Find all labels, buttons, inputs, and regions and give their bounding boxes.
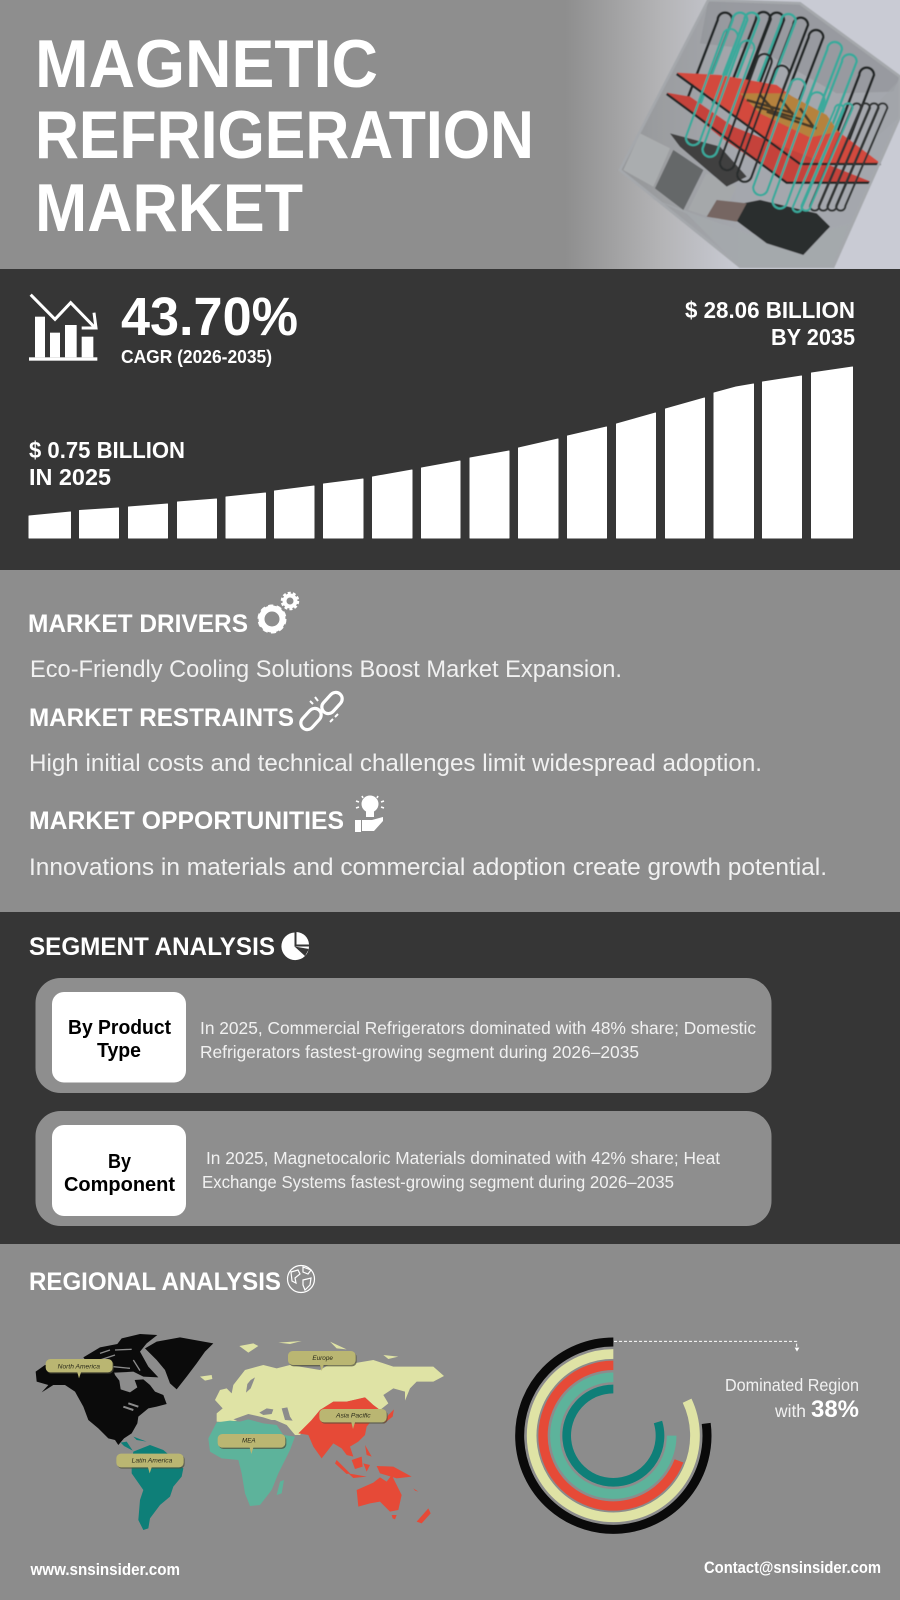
heading: regional analysis: REGIONAL ANALYSIS: [29, 1268, 281, 1296]
label: [64, 1151, 175, 1196]
label: Component: [64, 1174, 175, 1196]
description: [200, 1018, 756, 1062]
heading: market opportunities: MARKET OPPORTUNITIES: [29, 807, 344, 835]
footer: website: www.snsinsider.com: [30, 1561, 180, 1579]
label: Type: [97, 1040, 141, 1062]
description: In 2025, Magnetocaloric Materials dominated with 42% share; Heat: [206, 1148, 720, 1168]
icon: bulb in hand: [355, 796, 384, 832]
label: By Product: [68, 1017, 171, 1039]
callout: North America: North America: [58, 1363, 100, 1370]
panel: market dynamics: [0, 570, 900, 912]
callout: Latin America: [116, 1454, 185, 1473]
heading: segment analysis: SEGMENT ANALYSIS: [29, 933, 275, 961]
panel: segment analysis: [0, 912, 900, 1244]
map: Latin America: [121, 1437, 183, 1530]
title: MAGNETIC: [35, 26, 378, 102]
bar chart: growth: [29, 367, 852, 538]
map: Asia Pacific: [298, 1397, 431, 1523]
text: opportunities: Innovations in materials and commercial adoption create growth potential.: [29, 854, 827, 881]
panel: market size: [0, 269, 900, 570]
callout: Asia Pacific: Asia Pacific: [335, 1413, 371, 1420]
callout: Europe: [288, 1351, 357, 1371]
panel: regional analysis: [0, 1244, 900, 1600]
callout: MEA: [218, 1434, 286, 1454]
card: by product type: [36, 978, 772, 1093]
icon: globe: [288, 1266, 314, 1292]
callout: dominated region: Dominated Region: [725, 1375, 859, 1395]
callout: Asia Pacific: [319, 1409, 388, 1429]
title: REFRIGERATION: [35, 97, 534, 173]
arrow: dashed leader: [614, 1341, 799, 1352]
icon: gears: [259, 593, 298, 632]
world map: [36, 1334, 444, 1530]
icon: broken link: [298, 690, 345, 732]
2025 value: $ 0.75 BILLION: [29, 437, 185, 463]
label: [68, 1017, 171, 1062]
callout: dominated region: [725, 1375, 859, 1423]
radial chart: [520, 1342, 707, 1529]
icon: trend chart: [29, 295, 97, 361]
2035 value: [685, 297, 855, 350]
label box: [52, 992, 186, 1082]
card: by component: [36, 1111, 772, 1226]
callout: MEA: MEA: [242, 1438, 256, 1445]
icon: pie chart: [281, 932, 309, 960]
callout: Europe: Europe: [312, 1355, 333, 1362]
description: Exchange Systems fastest-growing segment during 2026–2035: [202, 1172, 674, 1192]
CAGR label: CAGR (2026-2035): [121, 347, 272, 367]
text: drivers: Eco-Friendly Cooling Solutions Boost Market Expansion.: [30, 656, 622, 683]
callout: North America: [46, 1359, 114, 1378]
map: Africa: [208, 1419, 295, 1506]
title: MARKET: [35, 170, 303, 246]
description: Refrigerators fastest-growing segment during 2026–2035: [200, 1042, 639, 1062]
map: North America: [36, 1334, 213, 1445]
map: Europe and North Asia: [200, 1341, 444, 1435]
2035 value: BY 2035: [771, 324, 855, 350]
2025 value: IN 2025: [29, 464, 111, 490]
2025 value: [29, 437, 185, 490]
label: By: [108, 1151, 132, 1173]
description: [202, 1148, 720, 1192]
text: restraints: High initial costs and technical challenges limit widespread adoption.: [29, 750, 762, 777]
CAGR value: 43.70%: [121, 287, 298, 347]
heading: market drivers: MARKET DRIVERS: [28, 610, 248, 638]
2035 value: $ 28.06 BILLION: [685, 297, 855, 323]
heading: market restraints: MARKET RESTRAINTS: [29, 704, 294, 732]
callout: dominated region: with: [774, 1401, 806, 1421]
title: [35, 26, 534, 246]
image: magnetic refrigerator cutaway: [620, 0, 900, 267]
callout: Latin America: Latin America: [132, 1458, 173, 1465]
description: In 2025, Commercial Refrigerators dominated with 48% share; Domestic: [200, 1018, 756, 1038]
callout: dominated region: 38%: [811, 1396, 859, 1423]
label box: [52, 1125, 186, 1216]
panel: header background: [0, 0, 900, 270]
